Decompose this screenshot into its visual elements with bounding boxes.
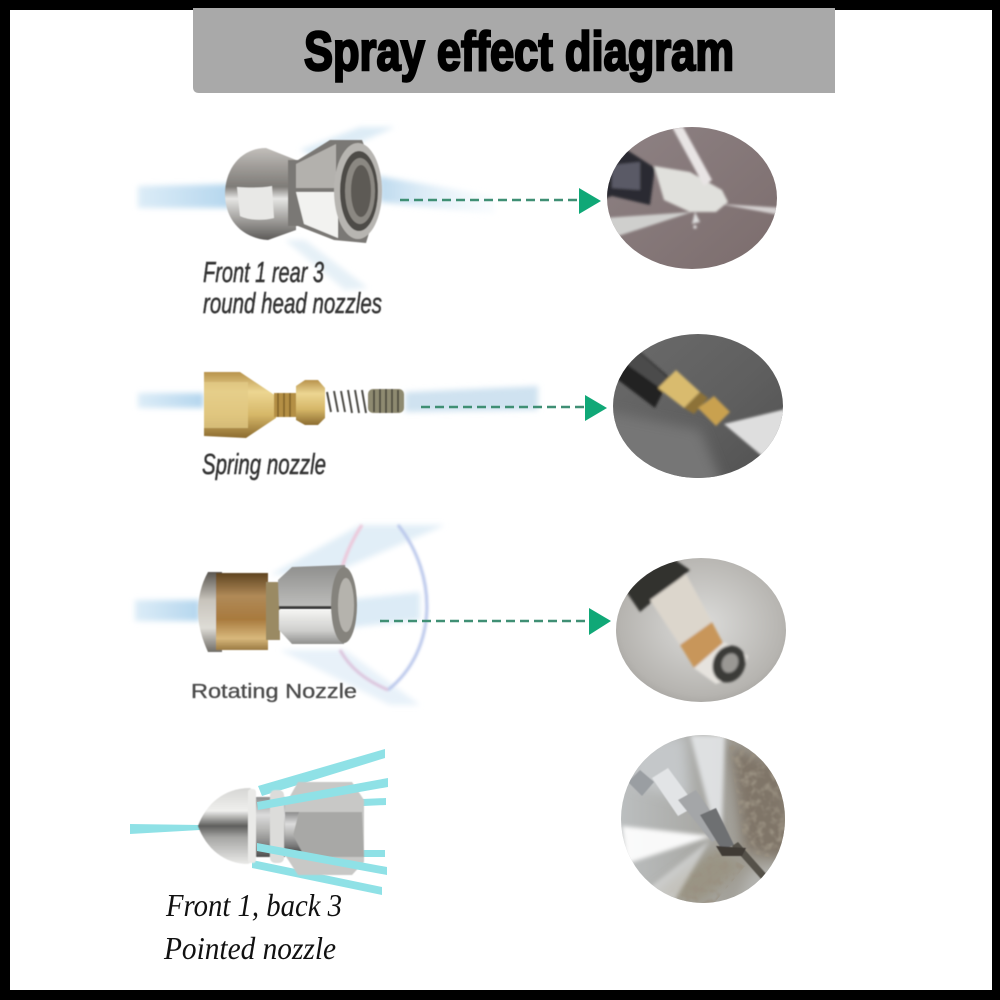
label: front 1 rear 3 [203,257,382,320]
label: spring nozzle: Spring nozzle [202,449,326,481]
label: front 1 rear 3: Front 1 rear 3 [203,257,324,289]
title: Spray effect diagram [304,20,734,82]
spray ring [340,525,427,690]
icon: round head nozzle [225,140,382,243]
row 4: pointed nozzle [130,730,790,966]
label: front 1, back 3 pointed nozzle: Front 1, back 3 [165,887,342,923]
label: front 1, back 3 pointed nozzle: Pointed nozzle [163,930,336,966]
water spray streaks [138,386,538,412]
photo: rotating nozzle closeup [616,558,786,702]
icon: brass spring nozzle [204,372,404,438]
icon: pointed nozzle [198,782,364,875]
banner background [193,8,835,93]
water spray streaks [138,127,495,290]
dashed arrow 3 [380,608,611,635]
icon: rotating nozzle [198,565,357,652]
photo: pointed nozzle spraying [621,735,785,903]
row 3: rotating nozzle [135,525,792,710]
label: front 1 rear 3: round head nozzles [203,288,382,320]
row 1: round head nozzle [138,120,785,320]
label: rotating nozzle: Rotating Nozzle [191,681,357,703]
photo: spring nozzle spraying [613,334,783,478]
photo: round nozzle spraying [607,127,777,269]
water spray fan [135,525,445,705]
dashed arrow 1 [400,188,601,214]
dashed arrow 2 [421,395,607,421]
label: front 1, back 3 pointed nozzle [163,887,342,966]
title banner [193,8,835,93]
cyan water jets over nozzle [257,778,388,875]
cyan water jets behind nozzle [130,749,386,895]
row 2: spring nozzle [138,330,790,490]
